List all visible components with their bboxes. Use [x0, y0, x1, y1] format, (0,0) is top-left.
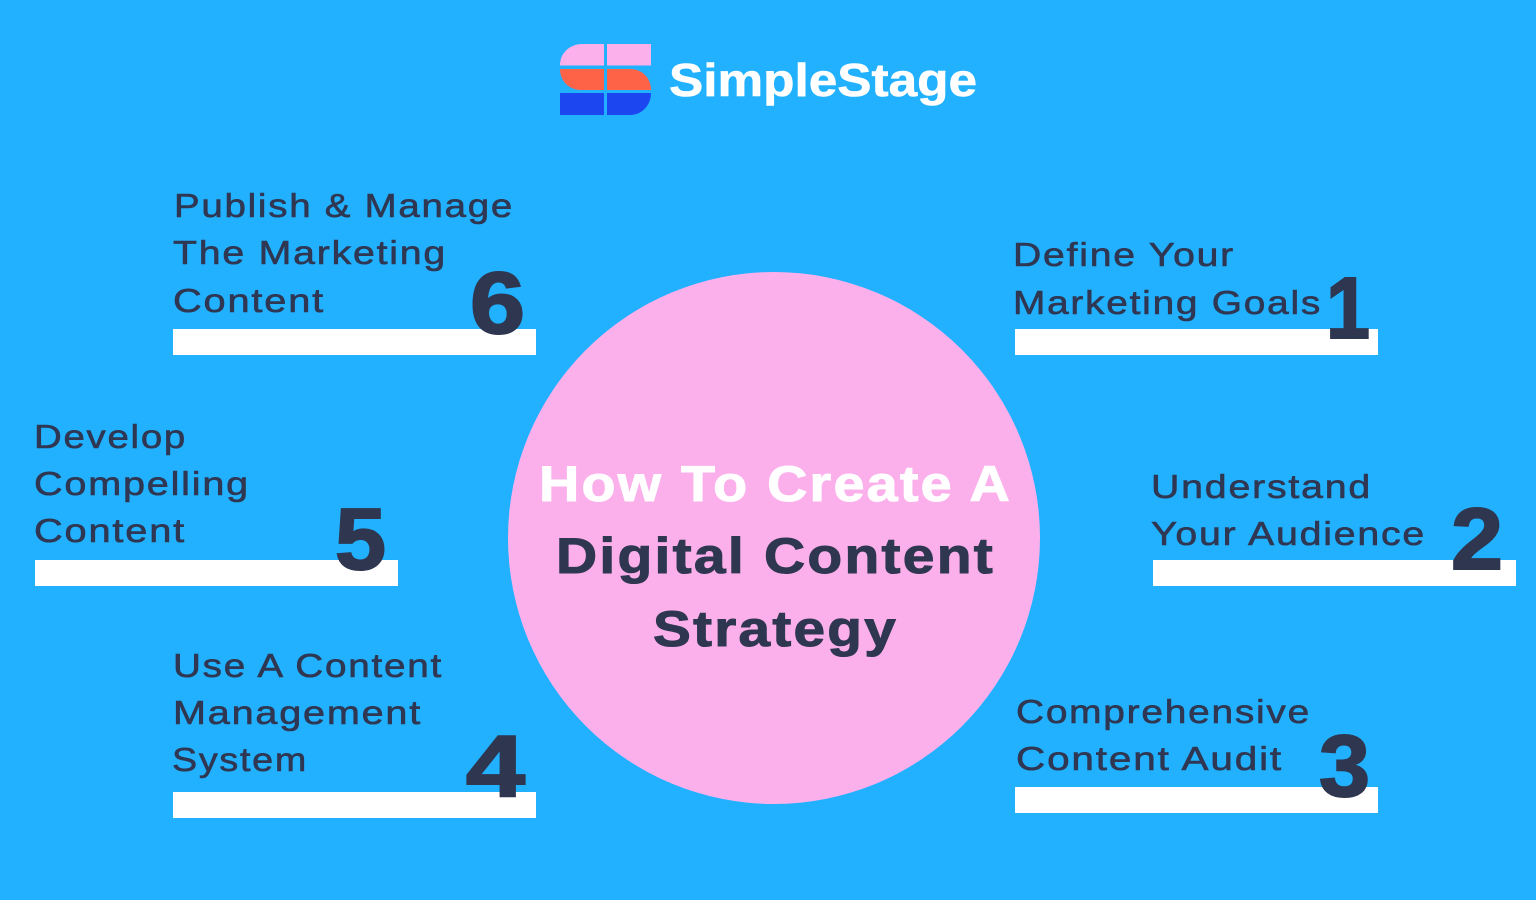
logo mark	[560, 44, 651, 115]
step 4 label: Use A Content	[173, 647, 443, 684]
logo: SimpleStage	[560, 44, 977, 115]
step 3 label: Content Audit	[1016, 740, 1283, 777]
step 1 label: Marketing Goals	[1013, 284, 1322, 321]
title line 1: How To Create A	[539, 456, 1012, 512]
step 5 bar	[35, 560, 398, 586]
step 2 number: 2	[1451, 491, 1503, 588]
step 3 label: Comprehensive	[1016, 693, 1311, 730]
step 3 label	[1016, 693, 1311, 777]
step 2 label: Understand	[1151, 468, 1372, 505]
step 2 label: Your Audience	[1151, 515, 1426, 552]
step 4: Use A Content Management System	[172, 647, 536, 818]
step 2 bar	[1153, 560, 1516, 586]
step 5 label: Compelling	[34, 465, 250, 502]
step 4 bar	[173, 792, 536, 818]
step 3: Comprehensive Content Audit	[1015, 693, 1378, 815]
step 6: Publish & Manage The Marketing Content	[173, 187, 536, 355]
step 2: Understand Your Audience	[1151, 468, 1516, 588]
step 3 bar	[1015, 787, 1378, 813]
step 1 number: 1	[1326, 260, 1370, 357]
step 2 label	[1151, 468, 1426, 552]
title line 3: Strategy	[653, 601, 898, 657]
step 6 bar	[173, 329, 536, 355]
step 4 number: 4	[466, 718, 525, 815]
step 5 label: Develop	[34, 418, 187, 455]
step 5: Develop Compelling Content	[34, 418, 398, 588]
step 6 label: The Marketing	[173, 234, 447, 271]
step 1 label	[1013, 236, 1322, 321]
step 6 label: Content	[173, 282, 325, 319]
step 4 label	[172, 647, 443, 778]
step 1 bar	[1015, 329, 1378, 355]
step 5 label: Content	[34, 512, 186, 549]
step 6 number: 6	[470, 255, 525, 352]
step 6 label: Publish & Manage	[174, 187, 514, 224]
step 5 number: 5	[335, 491, 386, 588]
main title	[539, 456, 1012, 657]
title line 2: Digital Content	[556, 528, 995, 584]
step 1: Define Your Marketing Goals	[1013, 236, 1378, 357]
logo wordmark: SimpleStage	[669, 54, 977, 106]
step 5 label	[34, 418, 250, 549]
step 6 label	[173, 187, 514, 319]
step 3 number: 3	[1319, 718, 1370, 815]
step 1 label: Define Your	[1013, 236, 1235, 273]
step 4 label: Management	[173, 694, 422, 731]
step 4 label: System	[172, 741, 308, 778]
center circle	[508, 272, 1040, 804]
